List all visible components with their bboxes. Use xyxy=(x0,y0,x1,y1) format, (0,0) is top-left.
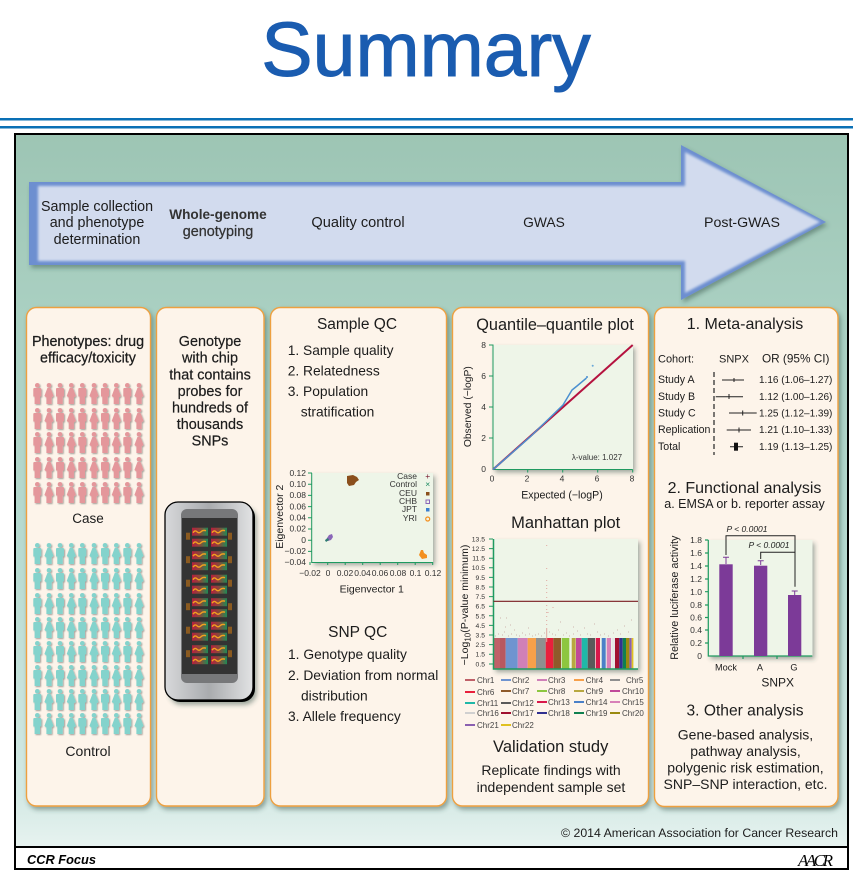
bar chart: P < 0.0001 xyxy=(748,540,790,550)
genotype text: Genotype xyxy=(179,334,241,350)
scatter plot: Control xyxy=(390,479,417,489)
meta-analysis heading: 1. Meta-analysis xyxy=(687,316,803,333)
panel: post-GWAS xyxy=(654,308,838,806)
scatter plot: 0.1 xyxy=(410,568,422,578)
scatter plot: 0 xyxy=(326,568,331,578)
sample QC list: 2. Relatedness xyxy=(288,364,380,378)
phenotypes heading: Phenotypes: drug xyxy=(32,334,144,350)
scatter plot: 0.04 xyxy=(289,512,306,522)
bar chart: P < 0.0001 xyxy=(726,524,768,534)
arrow step: post-GWAS: Post-GWAS xyxy=(704,215,780,231)
genotype text: with chip xyxy=(181,351,238,367)
QQ plot: 8 xyxy=(630,474,635,484)
QQ plot xyxy=(463,340,635,501)
bar chart: 1.8 xyxy=(690,535,702,545)
other analysis text: Gene-based analysis, xyxy=(678,726,813,742)
sample QC list: 3. Population xyxy=(288,384,368,399)
Manhattan plot: 2.5 xyxy=(476,642,485,649)
Manhattan plot: 4.5 xyxy=(476,623,485,630)
genotype text: SNPs xyxy=(192,434,228,450)
scatter plot: Eigenvector 1 xyxy=(340,584,404,596)
scatter plot: YRI xyxy=(403,513,417,523)
QQ plot: 0 xyxy=(481,464,486,474)
validation heading: Validation study xyxy=(493,738,609,756)
other analysis text: pathway analysis, xyxy=(690,743,801,759)
other analysis text: SNP–SNP interaction, etc. xyxy=(664,776,827,792)
QQ plot: 6 xyxy=(481,371,486,381)
Manhattan plot: 3.5 xyxy=(476,632,485,640)
bar chart: A xyxy=(757,663,764,673)
case label: Case xyxy=(72,511,104,526)
genotype text: that contains xyxy=(169,367,251,383)
scatter plot: CEU xyxy=(399,488,417,498)
Manhattan plot heading: Manhattan plot xyxy=(511,514,621,532)
functional analysis subheading: a. EMSA or b. reporter assay xyxy=(664,497,825,511)
Manhattan plot: 1.5 xyxy=(476,652,485,658)
bar chart: 1.4 xyxy=(690,561,702,571)
scatter plot: 0.12 xyxy=(425,568,442,578)
scatter plot: −0.02 xyxy=(284,546,306,556)
Manhattan legend: Chr4 xyxy=(586,676,604,685)
forest plot: 1.25 (1.12–1.39) xyxy=(759,409,832,420)
arrow step: genotyping: Whole-genome xyxy=(169,207,267,222)
functional analysis heading: 2. Functional analysis xyxy=(668,480,821,497)
forest plot: 1.16 (1.06–1.27) xyxy=(759,375,832,386)
Manhattan plot: 11.5 xyxy=(472,556,485,562)
panel: quality control xyxy=(270,308,446,806)
forest plot: 1.19 (1.13–1.25) xyxy=(759,442,832,453)
genotype text: probes for xyxy=(178,384,243,400)
arrow step: sample collection: determination xyxy=(54,232,140,248)
forest plot: 1.12 (1.00–1.26) xyxy=(759,392,832,403)
QQ plot: λ-value: 1.027 xyxy=(572,453,623,462)
forest plot: Study A xyxy=(658,374,695,386)
icon: case people xyxy=(33,383,144,503)
panel: GWAS xyxy=(452,308,648,806)
forest plot: Study C xyxy=(658,408,696,420)
phenotypes heading: efficacy/toxicity xyxy=(40,351,137,367)
arrow step: sample collection: Sample collection xyxy=(41,199,153,215)
scatter plot: −0.04 xyxy=(284,557,306,567)
Manhattan plot xyxy=(459,536,638,669)
Manhattan legend: Chr7 xyxy=(512,687,530,696)
scatter plot: JPT xyxy=(402,504,417,514)
Manhattan plot: 12.5 xyxy=(472,546,485,553)
scatter plot: 0.08 xyxy=(390,568,407,578)
scatter plot: + xyxy=(425,471,430,481)
bar chart: 1.6 xyxy=(690,548,702,558)
scatter plot: Case xyxy=(397,471,417,481)
bar chart: 0.6 xyxy=(690,612,702,622)
arrow step: sample collection: and phenotype xyxy=(50,215,144,231)
Manhattan plot: −Log xyxy=(459,642,471,665)
SNP QC list: 2. Deviation from normal xyxy=(288,668,438,683)
Manhattan legend: Chr17 xyxy=(512,709,534,718)
panel: phenotypes xyxy=(26,308,150,806)
Manhattan plot: 13.5 xyxy=(472,536,485,544)
scatter plot: 0.06 xyxy=(372,568,389,578)
scatter plot: 0 xyxy=(301,535,306,545)
forest plot: Replication xyxy=(658,424,711,436)
genotype text: hundreds of xyxy=(172,400,249,416)
validation text: independent sample set xyxy=(477,779,625,795)
sample QC list: 1. Sample quality xyxy=(288,343,394,358)
panel: genotype chip xyxy=(156,308,264,806)
bar chart: 0.4 xyxy=(690,625,702,635)
Manhattan legend: Chr19 xyxy=(586,709,608,718)
Manhattan legend: Chr16 xyxy=(477,709,499,718)
Manhattan legend xyxy=(465,676,646,730)
bar chart xyxy=(669,524,812,690)
Manhattan plot: 10.5 xyxy=(472,565,485,572)
bar chart: 1.0 xyxy=(690,587,702,597)
Manhattan legend: Chr11 xyxy=(477,699,499,708)
bar chart: Mock xyxy=(715,663,737,673)
Manhattan legend: Chr3 xyxy=(548,676,566,685)
bar chart: 0.8 xyxy=(690,600,702,610)
bar chart: 1.2 xyxy=(690,574,702,584)
SNP QC list: 1. Genotype quality xyxy=(288,647,407,662)
footer label: CCR Focus xyxy=(27,852,96,867)
Manhattan legend: Chr21 xyxy=(477,721,499,730)
forest plot xyxy=(658,352,832,455)
icon: control people xyxy=(33,543,144,734)
Manhattan legend: Chr20 xyxy=(622,709,644,718)
scatter plot: 0.02 xyxy=(289,524,306,534)
process arrow xyxy=(29,145,826,300)
Manhattan legend: Chr1 xyxy=(477,676,495,685)
QQ plot heading: Quantile–quantile plot xyxy=(476,316,634,334)
scatter plot: 0.06 xyxy=(289,502,306,512)
Manhattan plot: 0.5 xyxy=(476,662,485,668)
Manhattan plot: 9.5 xyxy=(476,575,485,582)
scatter plot: 0.10 xyxy=(289,479,306,489)
Manhattan plot: 10 xyxy=(464,632,472,642)
Manhattan plot: (P-value minimum) xyxy=(459,545,471,633)
Manhattan legend: Chr5 xyxy=(626,676,644,685)
QQ plot: 6 xyxy=(595,474,600,484)
Manhattan legend: Chr15 xyxy=(622,698,644,707)
arrow step: GWAS: GWAS xyxy=(523,215,565,230)
forest plot: OR (95% CI) xyxy=(762,352,830,366)
Manhattan plot: 5.5 xyxy=(476,614,485,620)
icon: genotyping chip xyxy=(165,502,255,702)
other analysis heading: 3. Other analysis xyxy=(686,703,804,720)
logo: AACR xyxy=(797,851,834,870)
forest plot: 1.21 (1.10–1.33) xyxy=(759,425,832,436)
SNP QC list: distribution xyxy=(301,689,368,704)
scatter plot: Eigenvector 2 xyxy=(274,484,286,549)
SNP QC heading: SNP QC xyxy=(328,624,387,641)
QQ plot: Observed (−logP) xyxy=(463,366,474,447)
scatter plot: 0.02 xyxy=(337,568,354,578)
Manhattan legend: Chr18 xyxy=(548,709,570,718)
scatter plot: 0.12 xyxy=(289,468,306,478)
Manhattan legend: Chr2 xyxy=(512,676,530,685)
scatter plot xyxy=(274,468,442,596)
title: Summary xyxy=(261,7,591,93)
Manhattan legend: Chr8 xyxy=(548,687,566,696)
other analysis text: polygenic risk estimation, xyxy=(667,760,824,776)
SNP QC list: 3. Allele frequency xyxy=(288,709,401,724)
copyright: © 2014 American Association for Cancer Research xyxy=(561,826,838,840)
QQ plot: 8 xyxy=(481,340,486,350)
forest plot: Total xyxy=(658,441,680,453)
scatter plot: 0.04 xyxy=(354,568,371,578)
Manhattan legend: Chr13 xyxy=(548,698,570,707)
arrow step: quality control: Quality control xyxy=(311,215,405,231)
Manhattan legend: Chr10 xyxy=(622,687,644,696)
bar chart: 0.2 xyxy=(690,638,702,648)
Manhattan plot: 7.5 xyxy=(476,594,485,601)
forest plot: SNPX xyxy=(719,354,750,366)
Manhattan legend: Chr12 xyxy=(512,699,534,708)
scatter plot: 0.08 xyxy=(289,490,306,500)
bar chart: SNPX xyxy=(761,676,794,690)
QQ plot: 4 xyxy=(481,402,486,412)
QQ plot: Expected (−logP) xyxy=(521,489,603,501)
control label: Control xyxy=(65,743,111,759)
QQ plot: 2 xyxy=(525,474,530,484)
sample QC list: stratification xyxy=(301,405,374,420)
arrow step: genotyping: genotyping xyxy=(183,224,253,240)
scatter plot: −0.02 xyxy=(299,568,321,578)
Manhattan plot: 8.5 xyxy=(476,584,485,592)
Manhattan legend: Chr14 xyxy=(586,698,608,707)
bar chart: Relative luciferase activity xyxy=(669,535,681,660)
genotype text: thousands xyxy=(177,417,243,433)
forest plot: Study B xyxy=(658,391,695,403)
bar chart: 0 xyxy=(697,651,702,661)
scatter plot: CHB xyxy=(399,496,417,506)
scatter plot: × xyxy=(425,479,430,489)
QQ plot: 4 xyxy=(560,474,565,484)
Manhattan legend: Chr6 xyxy=(477,688,495,697)
Manhattan plot: 6.5 xyxy=(476,604,485,610)
Manhattan legend: Chr9 xyxy=(586,687,604,696)
QQ plot: 0 xyxy=(490,474,495,484)
forest plot: Cohort: xyxy=(658,354,694,366)
QQ plot: 2 xyxy=(481,433,486,443)
Manhattan legend: Chr22 xyxy=(512,721,534,730)
sample QC heading: Sample QC xyxy=(317,316,397,333)
bar chart: G xyxy=(790,663,798,673)
validation text: Replicate findings with xyxy=(481,762,621,778)
